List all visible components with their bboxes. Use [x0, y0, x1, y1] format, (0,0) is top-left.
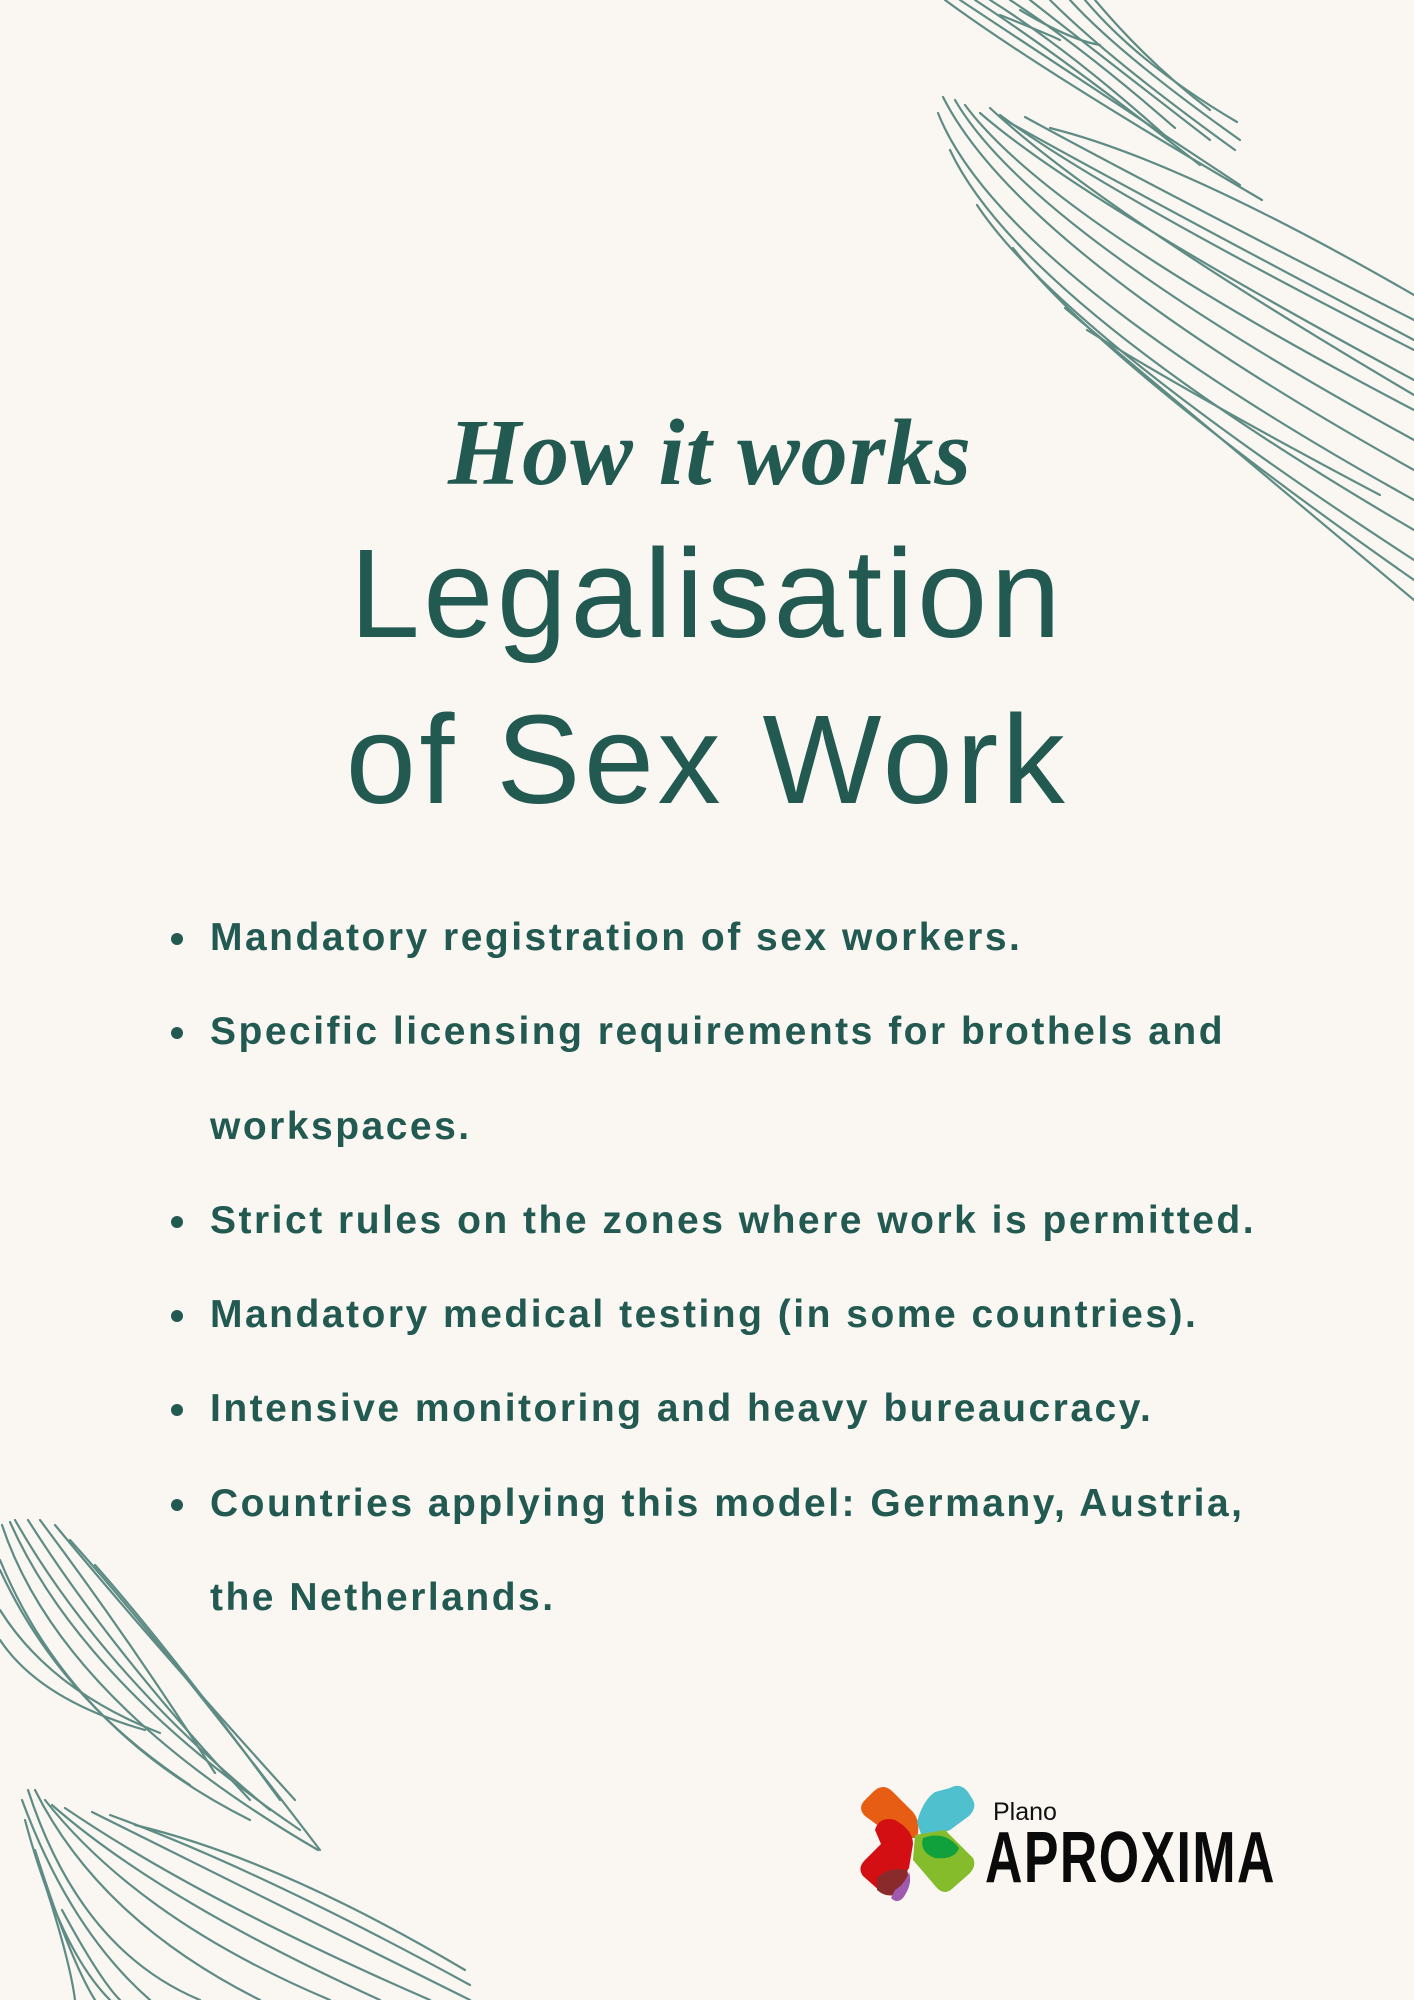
bullet 6	[171, 1482, 1244, 1619]
icon: coloured X	[860, 1786, 974, 1901]
bullet 1: Mandatory registration of sex workers.	[210, 916, 1022, 959]
bullet 3: Strict rules on the zones where work is permitted.	[210, 1199, 1256, 1242]
bullet 5: Intensive monitoring and heavy bureaucracy.	[210, 1387, 1153, 1430]
logo text: Plano: Plano	[993, 1798, 1057, 1826]
bullet list	[171, 916, 1256, 1619]
bullet 6: the Netherlands.	[210, 1576, 556, 1619]
script heading: How it works	[448, 401, 972, 505]
logo text: APROXIMA: APROXIMA	[985, 1818, 1276, 1898]
bullet 6: Countries applying this model: Germany, Austria,	[210, 1482, 1244, 1525]
logo: Plano Aproxima	[860, 1786, 1276, 1901]
bullet 4: Mandatory medical testing (in some countries).	[210, 1293, 1198, 1336]
bullet 2: workspaces.	[210, 1105, 472, 1148]
title line 1: Legalisation	[350, 523, 1064, 664]
bullet 2	[171, 1010, 1225, 1148]
bullet 2: Specific licensing requirements for brothels and	[210, 1010, 1225, 1053]
title line 2: of Sex Work	[346, 689, 1068, 830]
